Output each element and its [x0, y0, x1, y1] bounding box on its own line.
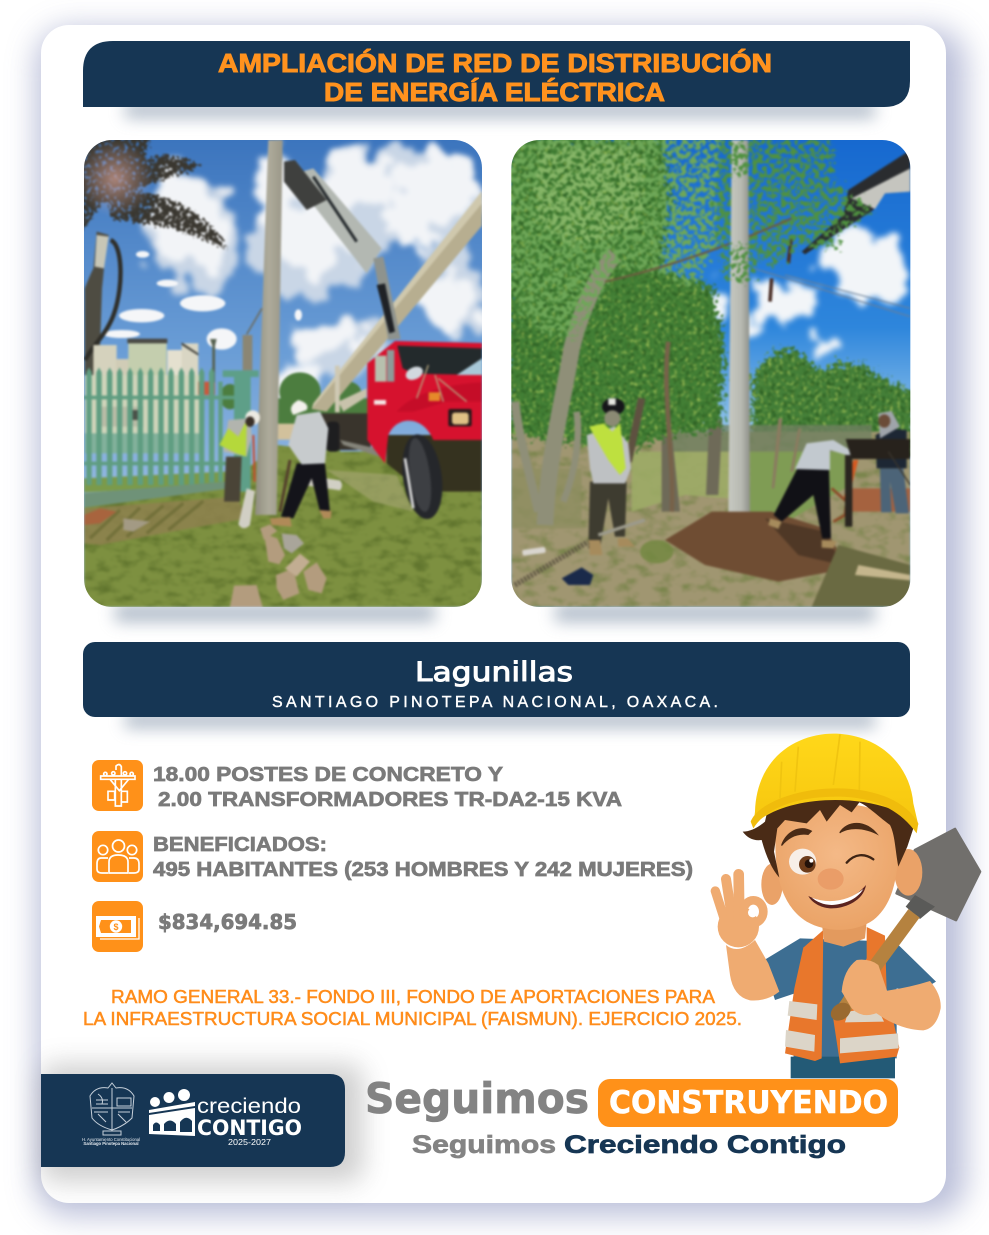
location name: Lagunillas — [415, 657, 573, 688]
title text: AMPLIACIÓN DE RED DE DISTRIBUCIÓN — [218, 48, 772, 78]
trees on right — [752, 349, 915, 455]
title text: DE ENERGÍA ELÉCTRICA — [324, 78, 665, 107]
icon: power pole — [92, 760, 143, 811]
title banner — [83, 41, 910, 107]
tree trunks — [515, 255, 672, 525]
gate post — [223, 370, 259, 492]
beneficiaries text: 495 HABITANTES (253 HOMBRES Y 242 MUJERES) — [153, 859, 693, 881]
nose — [818, 868, 844, 890]
dirt mound — [665, 512, 848, 582]
worker with vest — [587, 398, 635, 555]
creciendo contigo logo: CONTIGO — [197, 1116, 302, 1140]
vest — [785, 927, 899, 1063]
illustration: boy construction worker with shovel — [715, 734, 980, 1078]
arms and hands — [715, 874, 941, 1030]
funding source note: LA INFRAESTRUCTURA SOCIAL MUNICIPAL (FAISMUN). EJERCICIO 2025. — [83, 1009, 742, 1029]
winking eye — [847, 855, 873, 863]
palm tree — [77, 138, 227, 375]
photo: crane truck installing concrete pole — [77, 135, 490, 615]
municipality caption: Santiago Pinotepa Nacional — [83, 1141, 139, 1146]
field — [511, 432, 910, 607]
main foliage — [507, 137, 725, 450]
bag and bottle on ground — [515, 520, 645, 585]
municipal coat of arms — [90, 1083, 134, 1135]
investment amount: $834,694.85 — [158, 910, 297, 934]
creciendo contigo logo: creciendo — [197, 1095, 301, 1118]
poles and transformers text — [153, 764, 622, 811]
trees behind — [220, 372, 371, 425]
location banner — [83, 642, 910, 717]
crane arm — [284, 160, 401, 340]
icon: money — [92, 901, 143, 952]
shovel handle — [842, 913, 914, 1012]
creciendo contigo logo — [149, 1089, 302, 1147]
beneficiaries text — [153, 834, 693, 881]
creciendo contigo logo: 2025-2027 — [228, 1138, 272, 1147]
funding source note — [83, 987, 742, 1029]
beneficiaries text: BENEFICIADOS: — [153, 834, 327, 856]
municipality caption: H. Ayuntamiento Constitucional — [82, 1137, 140, 1142]
pants — [791, 1057, 895, 1078]
crane tip — [802, 150, 910, 254]
hoisted pole — [312, 191, 482, 412]
ears — [761, 864, 783, 905]
lawn — [84, 445, 482, 607]
fence — [84, 367, 234, 485]
slogan pill: construyendo: CONSTRUYENDO — [609, 1085, 888, 1121]
icon: money: $ — [113, 922, 119, 932]
truck — [321, 341, 482, 522]
pole — [728, 140, 750, 512]
slogan: seguimos: Seguimos — [365, 1074, 589, 1123]
shovel — [897, 829, 980, 920]
wire fence and posts — [672, 425, 872, 452]
smile — [808, 885, 866, 908]
hair — [743, 797, 913, 878]
funding source note: RAMO GENERAL 33.- FONDO III, FONDO DE APORTACIONES PARA — [111, 987, 715, 1007]
open eye — [789, 849, 816, 875]
poles and transformers text: 18.00 POSTES DE CONCRETO Y — [153, 764, 504, 786]
installed pole — [255, 140, 283, 515]
shirt — [763, 938, 936, 1058]
tagline: Seguimos — [412, 1131, 556, 1159]
workers — [219, 400, 332, 527]
concrete cylinders — [238, 475, 342, 528]
upper canopy — [507, 137, 722, 342]
worker bending over — [768, 440, 858, 548]
tagline: Creciendo Contigo — [564, 1131, 846, 1159]
tagline — [412, 1131, 846, 1159]
head — [775, 804, 898, 930]
title text — [218, 48, 772, 107]
helmet — [751, 734, 918, 833]
rocks — [123, 518, 327, 607]
icon: people — [92, 831, 143, 882]
municipality: SANTIAGO PINOTEPA NACIONAL, OAXACA. — [272, 694, 718, 711]
hanging branches — [715, 140, 873, 282]
footer logo panel — [41, 1074, 345, 1167]
photo: workers digging by pole under trees — [505, 135, 915, 615]
neck — [822, 922, 867, 947]
poles and transformers text: 2.00 TRANSFORMADORES TR-DA2-15 KVA — [158, 789, 622, 811]
lamp post — [210, 339, 217, 382]
houses — [85, 339, 215, 453]
worker standing with black beam — [845, 411, 910, 527]
eyebrows — [781, 828, 812, 846]
municipality caption — [82, 1137, 140, 1146]
